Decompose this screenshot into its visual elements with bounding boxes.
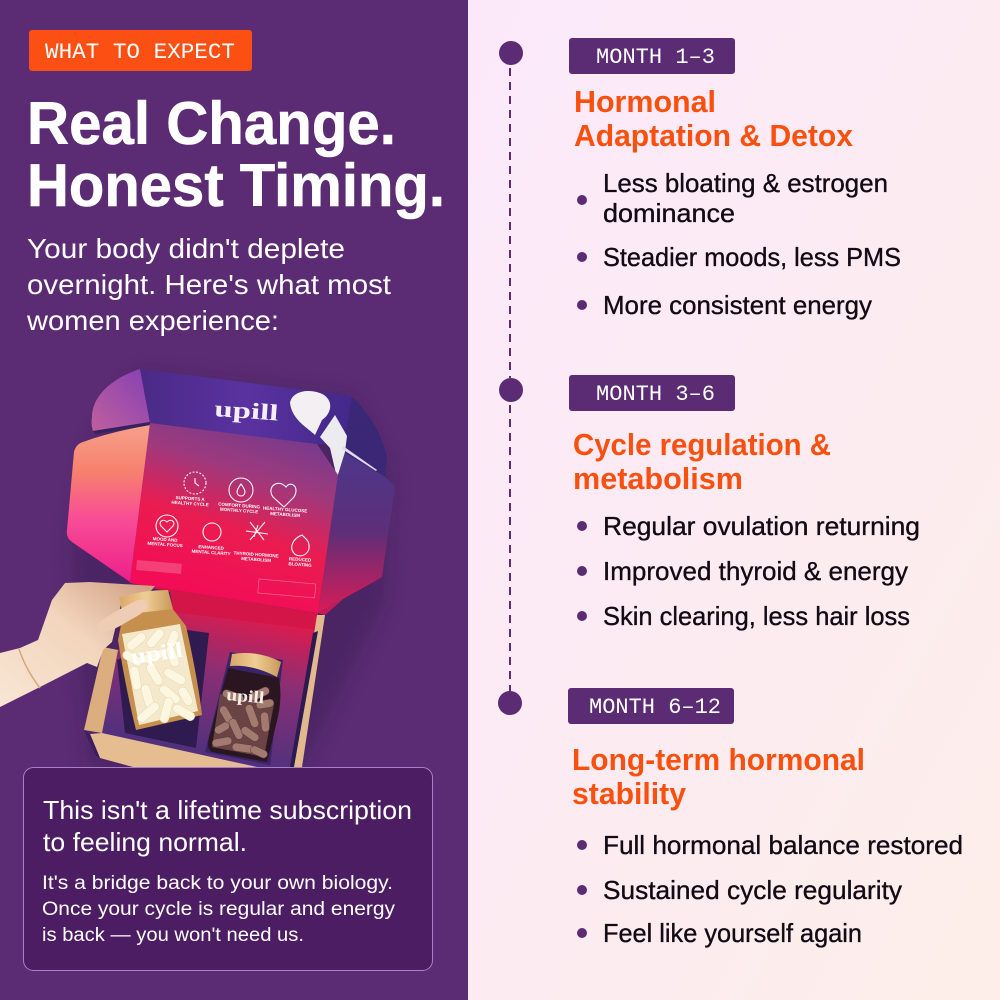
bullet list: More consistent energy xyxy=(603,290,872,320)
section heading: Cycle regulation & xyxy=(573,427,831,462)
section heading: stability xyxy=(572,776,687,811)
month tag xyxy=(569,375,735,411)
title xyxy=(27,90,445,219)
box: right upper ear xyxy=(335,397,387,476)
bullet list: dominance xyxy=(603,198,735,228)
photo: open mailer box with jars and hand: MENTAL FOCUS xyxy=(147,541,183,548)
tag: what to expect: WHAT TO EXPECT xyxy=(45,40,235,65)
box: benefit icons and captions xyxy=(156,472,309,556)
photo: open mailer box with jars and hand xyxy=(0,369,394,770)
jar: light capsules: upill xyxy=(129,637,184,669)
bullet list xyxy=(577,830,963,948)
section heading xyxy=(572,742,865,811)
photo: open mailer box with jars and hand: METABOLISM xyxy=(270,511,300,518)
section: month 3-6 xyxy=(569,375,920,631)
box: fine print xyxy=(136,560,316,598)
month tag xyxy=(568,688,734,724)
callout card: Once your cycle is regular and energy xyxy=(42,899,396,920)
photo: open mailer box with jars and hand: COMFORT DURING xyxy=(218,502,261,509)
box: right flap xyxy=(318,453,394,613)
box: left flap xyxy=(67,425,150,582)
intro text: women experience: xyxy=(26,305,279,336)
bullet list: Steadier moods, less PMS xyxy=(603,242,901,272)
photo: open mailer box with jars and hand: BLOATING xyxy=(288,561,312,568)
photo: open mailer box with jars and hand: REDUCED xyxy=(289,556,312,563)
bullet list: Improved thyroid & energy xyxy=(603,556,908,586)
photo: open mailer box with jars and hand: MONTHLY CYCLE xyxy=(220,507,258,514)
section heading: metabolism xyxy=(573,461,743,496)
thumb over jar xyxy=(96,600,148,634)
jar: dark capsules xyxy=(208,653,281,762)
photo: open mailer box with jars and hand: ENHANCED xyxy=(198,544,225,551)
bullet list xyxy=(577,511,920,631)
callout card: to feeling normal. xyxy=(43,827,247,857)
section heading: Adaptation & Detox xyxy=(574,118,854,153)
title: Honest Timing. xyxy=(27,152,445,219)
box: lid flap xyxy=(140,369,352,444)
jar: dark capsules: upill xyxy=(226,685,265,707)
box: right cardboard wall xyxy=(293,615,325,767)
bullet list: Regular ovulation returning xyxy=(603,511,920,541)
box: left upper ear xyxy=(92,369,150,431)
section: month 6-12 xyxy=(568,688,963,948)
section heading xyxy=(573,427,831,496)
bullet list: Full hormonal balance restored xyxy=(603,830,963,860)
photo: open mailer box with jars and hand: METABOLISM xyxy=(241,556,271,563)
photo: open mailer box with jars and hand: MENTAL CLARITY xyxy=(191,549,231,556)
callout card: This isn't a lifetime subscription xyxy=(43,795,412,825)
month tag: MONTH 1–3 xyxy=(596,45,715,70)
box: front cardboard wall xyxy=(90,733,257,767)
bullet list: Feel like yourself again xyxy=(603,918,862,948)
box: dark insert behind jars xyxy=(117,630,209,748)
background: left panel xyxy=(0,0,468,1000)
box: main lid panel xyxy=(130,423,338,613)
callout card: It's a bridge back to your own biology. xyxy=(42,873,393,894)
photo: open mailer box with jars and hand: SUPPORTS A xyxy=(175,495,206,502)
title: Real Change. xyxy=(27,90,396,157)
section heading xyxy=(574,84,854,153)
timeline xyxy=(498,41,523,715)
background: right panel xyxy=(468,0,1000,1000)
photo: open mailer box with jars and hand: HEALTHY GLUCOSE xyxy=(263,505,307,514)
month tag xyxy=(569,38,735,74)
callout card: is back — you won't need us. xyxy=(42,925,304,946)
hand holding jar xyxy=(0,582,155,707)
intro text: overnight. Here's what most xyxy=(27,269,391,300)
photo: open mailer box with jars and hand: THYROID HORMONE xyxy=(233,550,279,559)
tag: what to expect xyxy=(29,30,252,71)
section heading: Hormonal xyxy=(574,84,716,119)
section: month 1-3 xyxy=(569,38,901,320)
intro text: Your body didn't deplete xyxy=(27,233,345,264)
bullet list: Sustained cycle regularity xyxy=(603,875,902,905)
bullet list: Less bloating & estrogen xyxy=(603,168,888,198)
photo: open mailer box with jars and hand: HEALTHY CYCLE xyxy=(171,500,209,507)
photo: open mailer box with jars and hand: MOOD AND xyxy=(153,536,178,543)
box: lid logo: upill xyxy=(214,396,279,425)
month tag: MONTH 3–6 xyxy=(596,382,715,407)
jar: light capsules xyxy=(118,590,202,730)
callout card xyxy=(24,768,432,970)
box: lid speech-drop emblem xyxy=(290,391,330,435)
month tag: MONTH 6–12 xyxy=(589,695,721,720)
bullet list: Skin clearing, less hair loss xyxy=(603,601,910,631)
box: interior tray xyxy=(100,612,318,767)
box: left cardboard wall xyxy=(84,647,118,733)
intro text xyxy=(26,233,391,336)
box: lid lower band xyxy=(130,583,318,631)
bullet list xyxy=(577,168,901,320)
section heading: Long-term hormonal xyxy=(572,742,865,777)
